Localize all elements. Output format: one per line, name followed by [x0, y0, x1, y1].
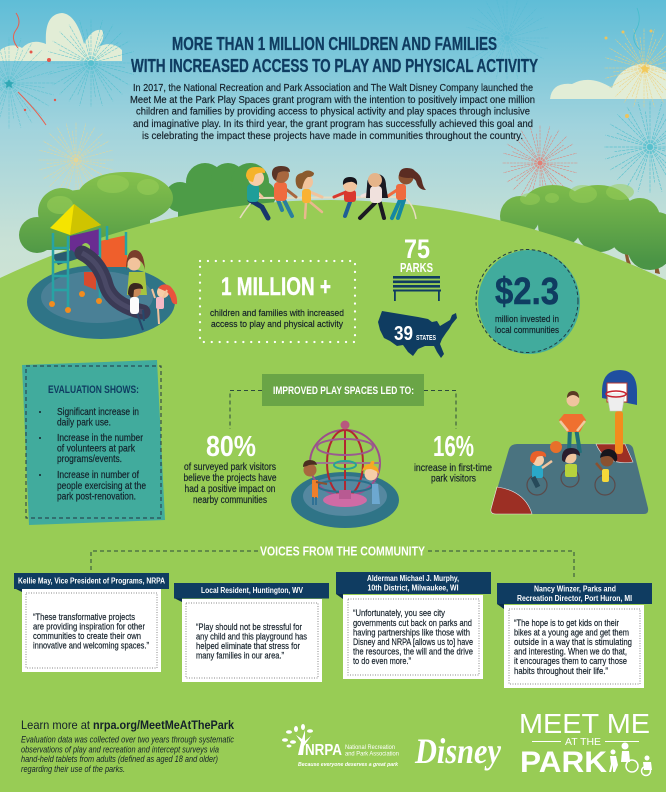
stat: 80 percent: of surveyed park visitors [184, 461, 276, 473]
stat: 39 states on US map [378, 311, 457, 358]
quote card: Alderman Murphy: Disney and NRPA [allows us to] have [353, 637, 473, 648]
quote card: Kellie May: are providing inspiration for other [33, 622, 145, 632]
background trees [19, 163, 666, 274]
stat: 1 million plus: children and families with increased [210, 308, 344, 319]
quote card: Nancy Winzer: bikes at a young age and get them [514, 628, 629, 638]
illustration: globe climber [291, 420, 399, 528]
sky background [0, 0, 666, 300]
logo: Meet Me at the Park: AT THE [565, 737, 601, 748]
quote card: Nancy Winzer: habits throughout their life.” [514, 666, 608, 677]
footer: learn more and methodology note: Learn more at [21, 718, 91, 732]
intro paragraph [130, 82, 535, 142]
logo: Meet Me at the Park [519, 708, 652, 779]
heading: voices from the community: VOICES FROM THE COMMUNITY [260, 544, 426, 558]
stat: 1 million plus: access to play and physical activity [211, 319, 343, 330]
stat: 80 percent: 80% [206, 431, 256, 463]
stat: 80 percent: had a positive impact on [184, 483, 276, 495]
stat: 75 parks: 75 [404, 234, 430, 264]
title [131, 34, 538, 76]
heading: improved play spaces [262, 374, 424, 406]
logo: NRPA [282, 724, 399, 768]
stat: 39 states on US map: STATES [416, 333, 436, 342]
quote card: Nancy Winzer: and interesting. When we do that, [514, 646, 627, 658]
logo: Meet Me at the Park: MEET ME [519, 708, 650, 739]
quote card: Alderman Murphy: Alderman Michael J. Murphy, [367, 574, 459, 583]
footer: learn more and methodology note: Evaluation data was collected over two years through systematic [21, 734, 234, 744]
fireworks [0, 0, 666, 201]
quote card: local resident [174, 583, 329, 682]
logo: NRPA: and Park Association [345, 752, 399, 758]
stat: 39 states on US map: 39 [394, 323, 413, 345]
stat: 2.3 million invested: million invested in [495, 314, 559, 325]
quote card: Nancy Winzer: Nancy Winzer, Parks and [534, 584, 616, 594]
quote card: Kellie May: communities to create their own [33, 631, 141, 642]
illustration: children playing tug of war [240, 166, 426, 219]
quote card: Alderman Murphy: governments cut back on parks and [353, 618, 472, 629]
panel: evaluation shows: daily park use. [57, 416, 111, 428]
stat: 2.3 million invested: $2.3 [495, 271, 559, 313]
quote card: Nancy Winzer: it encourages them to carry those [514, 656, 627, 667]
footer: learn more and methodology note [21, 718, 234, 774]
quote card: Nancy Winzer: Recreation Director, Port Huron, MI [517, 594, 632, 603]
stat: 16 percent: 16% [433, 431, 474, 463]
logo: NRPA: National Recreation [345, 745, 395, 751]
intro paragraph: is celebrating the impact these projects have made in communities throughout the country. [142, 130, 523, 142]
quote card: local resident: helped eliminate that stress for [196, 641, 300, 652]
heading: improved play spaces: IMPROVED PLAY SPACES LED TO: [273, 385, 414, 397]
panel: evaluation shows: people exercising at the [57, 480, 146, 492]
quote card: Alderman Murphy: to do even more.” [353, 656, 411, 667]
connector lines [230, 390, 456, 429]
stat: 80 percent [184, 431, 277, 506]
panel: evaluation shows: Increase in number of [57, 469, 139, 481]
logo: NRPA: NRPA [305, 742, 342, 759]
clouds [0, 13, 666, 99]
intro paragraph: and imaginative play. In its third year, the grant program has successfully achieved this goal and [133, 118, 533, 130]
title: WITH INCREASED ACCESS TO PLAY AND PHYSICAL ACTIVITY [131, 56, 538, 76]
panel: evaluation shows: programs/events. [57, 453, 122, 465]
quote card: Nancy Winzer: “The hope is to get kids on their [514, 618, 619, 629]
logo: Meet Me at the Park: PARK [520, 746, 607, 779]
footer: learn more and methodology note: regarding their use of the parks. [21, 764, 125, 774]
heading: voices from the community [91, 544, 574, 580]
stat: 2.3 million invested: local communities [495, 325, 559, 336]
quote card: Alderman Murphy: having partnerships like those with [353, 628, 470, 638]
quote card: local resident: many families in our area.” [196, 650, 284, 662]
quote card: Nancy Winzer [497, 583, 652, 688]
quote card: Nancy Winzer: outside in a way that is stimulating [514, 637, 632, 648]
logo: Disney: Disney [414, 731, 502, 771]
stat: 1 million plus [200, 261, 355, 342]
quote card: Kellie May [14, 573, 169, 672]
stat: 1 million plus: 1 MILLION + [221, 273, 331, 301]
stat: 75 parks: PARKS [400, 260, 433, 275]
stat: 80 percent: believe the projects have [184, 472, 277, 484]
footer: learn more and methodology note: nrpa.org/MeetMeAtThePark [93, 718, 234, 732]
quote card: Alderman Murphy [336, 572, 491, 679]
stat: 80 percent: nearby communities [193, 494, 267, 506]
intro paragraph: children and families by providing access to physical activity and play spaces through inclusive [136, 106, 530, 118]
intro paragraph: In 2017, the National Recreation and Park Association and The Walt Disney Company launched the [133, 82, 533, 94]
footer: learn more and methodology note: hand-held tablets from adults (defined as aged 18 and older) [21, 754, 218, 764]
panel: evaluation shows: EVALUATION SHOWS: [48, 384, 139, 396]
panel: evaluation shows: of volunteers at park [57, 442, 136, 454]
quote card: Kellie May: “These transformative projects [33, 612, 135, 623]
icon: park bench [393, 276, 441, 301]
quote card: Kellie May: innovative and welcoming spaces.” [33, 640, 149, 652]
quote card: local resident: any child and this playground has [196, 632, 307, 642]
stat: 16 percent: park visitors [431, 472, 476, 484]
footer: learn more and methodology note: observations of play and recreation and intercept surveys via [21, 744, 219, 754]
quote card: Alderman Murphy: 10th District, Milwaukee, WI [368, 584, 458, 592]
stat: 16 percent: increase in first-time [414, 462, 492, 474]
title: MORE THAN 1 MILLION CHILDREN AND FAMILIES [172, 34, 497, 54]
quote card: Alderman Murphy: the resources, the will and the drive [353, 646, 473, 658]
panel: evaluation shows: Increase in the number [57, 432, 143, 444]
illustration: playground with slide [27, 204, 177, 339]
quote card: Kellie May: Kellie May, Vice President of Programs, NRPA [18, 576, 165, 586]
quote card: local resident: “Play should not be stressful for [196, 622, 302, 633]
quote card: Alderman Murphy: “Unfortunately, you see city [353, 608, 445, 619]
stat: 16 percent [414, 431, 492, 484]
stat: 2.3 million invested [476, 250, 580, 354]
stat: 75 parks [400, 234, 433, 275]
panel: evaluation shows: park post-renovation. [57, 490, 136, 502]
intro paragraph: Meet Me at the Park Play Spaces grant program with the intention to positively impact one million [130, 94, 535, 106]
quote card: local resident: Local Resident, Huntington, WV [201, 586, 304, 595]
green hill [0, 200, 666, 792]
panel: evaluation shows: Significant increase in [57, 406, 139, 418]
illustration: basketball court [491, 370, 648, 514]
logo: NRPA: Because everyone deserves a great park [298, 762, 399, 768]
panel: evaluation shows [22, 360, 165, 525]
